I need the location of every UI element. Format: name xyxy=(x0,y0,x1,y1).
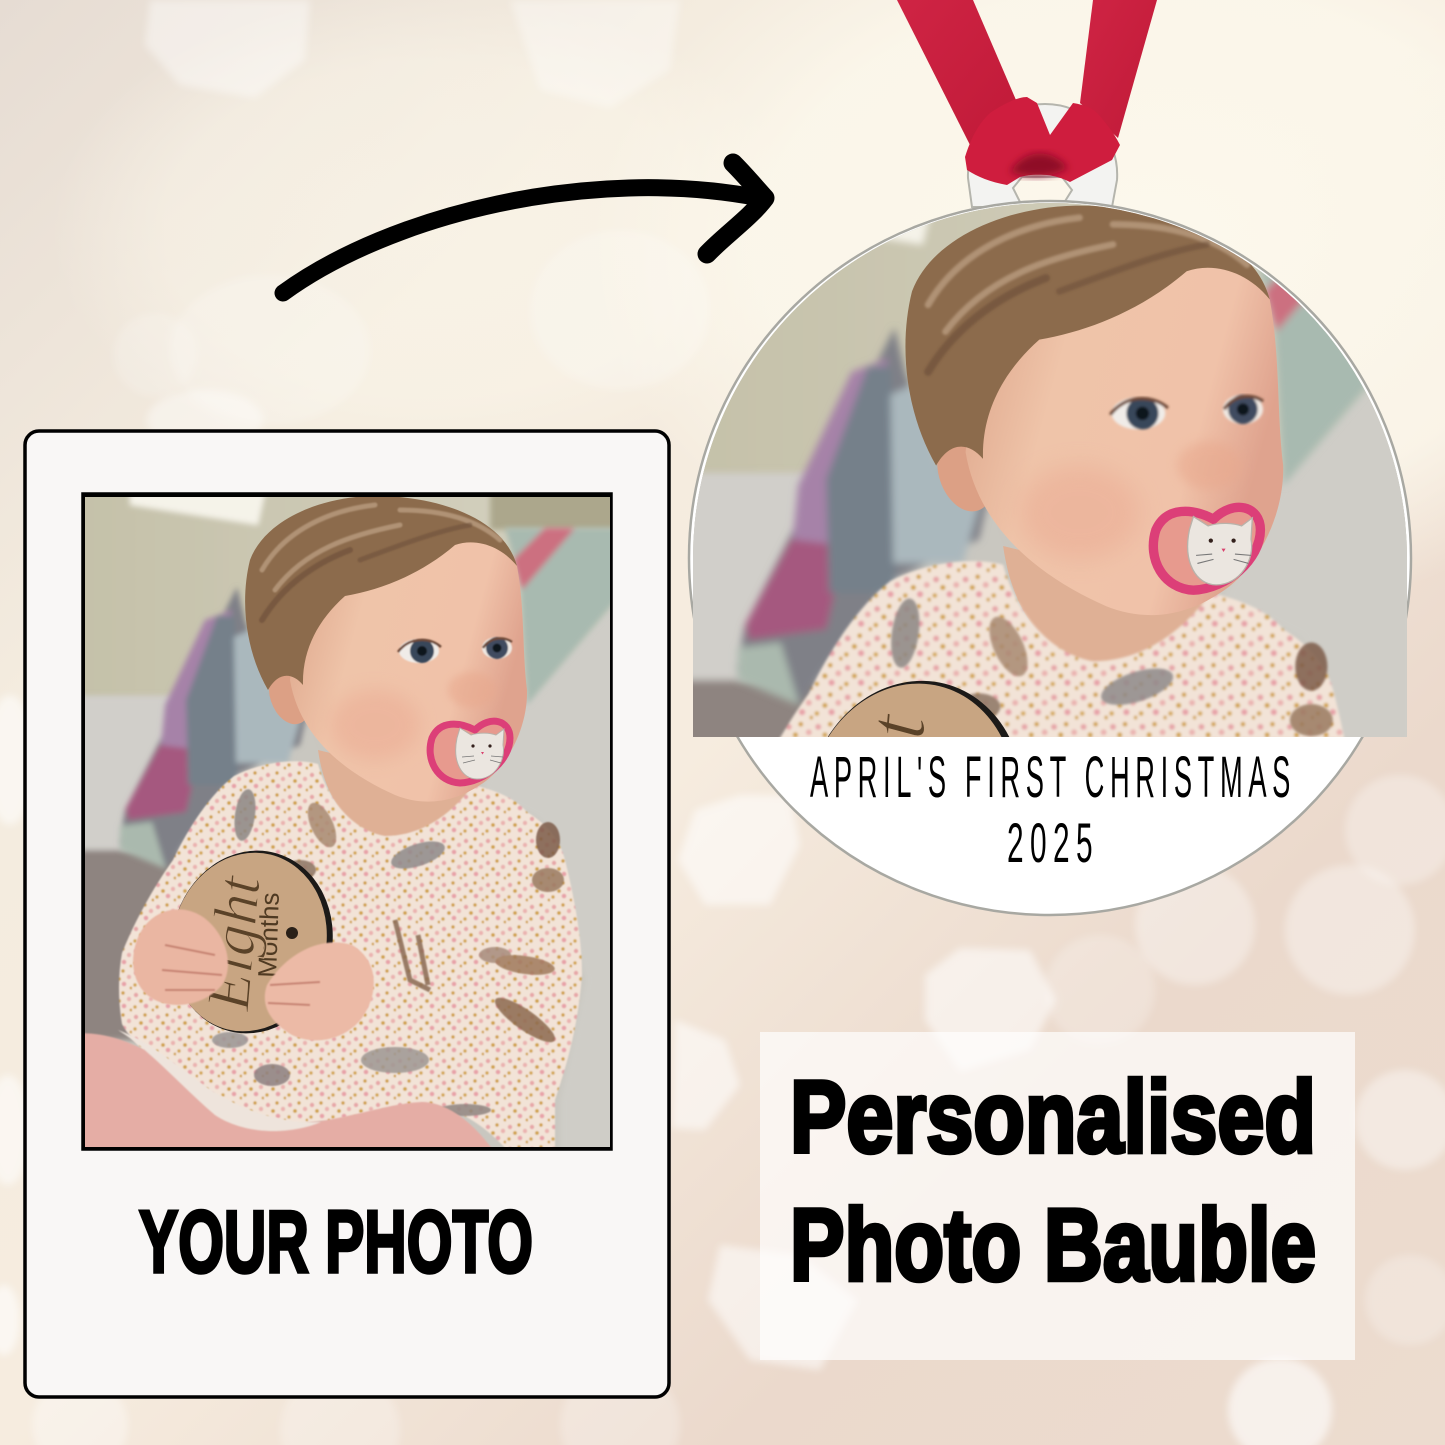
left eye xyxy=(398,639,441,663)
baby hands xyxy=(133,909,374,1040)
hair highlights xyxy=(262,505,500,620)
your photo label: YOUR PHOTO xyxy=(139,1192,533,1291)
nose xyxy=(448,672,496,708)
blanket xyxy=(119,528,625,869)
pacifier xyxy=(430,721,510,783)
bauble caption line 2: 2025 xyxy=(1007,811,1099,874)
sofa xyxy=(60,590,625,1160)
red ribbon xyxy=(897,0,1157,185)
bauble photo xyxy=(693,203,1407,737)
ribbon bow xyxy=(965,97,1120,185)
cat face xyxy=(456,728,504,779)
wooden disc xyxy=(152,833,352,1051)
face xyxy=(290,540,527,802)
title panel xyxy=(760,1032,1355,1360)
shirt xyxy=(119,761,582,1150)
neck xyxy=(318,750,478,838)
wooden disc: Eight xyxy=(194,872,274,1014)
panel: polaroid frame xyxy=(25,431,669,1397)
title line 1: Personalised xyxy=(790,1060,1316,1174)
arrow xyxy=(283,163,765,293)
right eye xyxy=(482,637,512,659)
right ribbon strand xyxy=(1080,0,1157,138)
bauble ornament xyxy=(657,104,1421,1109)
pants xyxy=(85,1030,491,1147)
hanging tab xyxy=(968,104,1117,207)
title line 2: Photo Bauble xyxy=(790,1188,1316,1302)
wooden disc: Months xyxy=(252,892,285,978)
photo border xyxy=(83,494,611,1149)
title backdrop xyxy=(760,1032,1355,1360)
hair xyxy=(245,496,517,690)
bauble disc xyxy=(689,201,1411,915)
left ribbon strand xyxy=(897,0,1016,145)
cheek shading xyxy=(330,690,420,760)
shirt bunny prints xyxy=(212,788,564,1116)
ear xyxy=(262,660,318,730)
room wall xyxy=(60,470,630,698)
polaroid card xyxy=(25,431,669,1397)
photo of baby xyxy=(85,497,610,1147)
photo base xyxy=(60,470,630,1170)
